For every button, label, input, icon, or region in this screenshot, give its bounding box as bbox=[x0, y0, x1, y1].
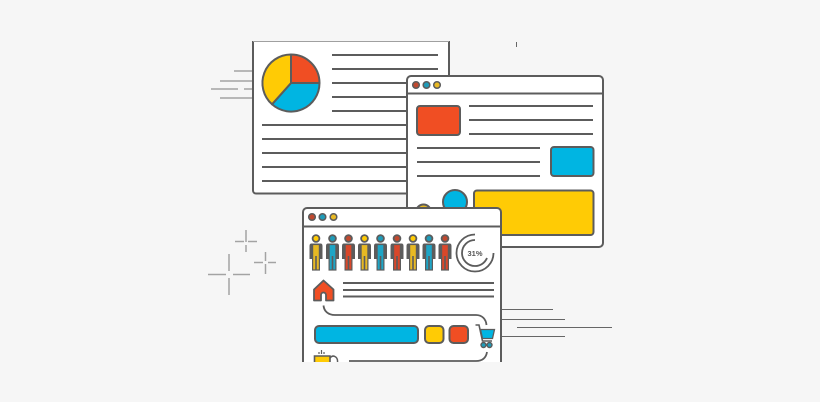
icon: shopping cart bbox=[476, 325, 494, 348]
people row bbox=[310, 235, 452, 270]
window text lines bbox=[417, 106, 593, 176]
panel: front browser window with people and shopping bbox=[302, 207, 502, 362]
window dots bbox=[413, 82, 440, 88]
panel: browser window with colour blocks bbox=[407, 76, 603, 247]
gauge 31%: 31% bbox=[467, 249, 483, 258]
yellow circle bbox=[416, 204, 431, 220]
blue bar bbox=[315, 326, 418, 343]
speed lines left bbox=[211, 71, 253, 98]
icon: house bbox=[314, 280, 334, 300]
connector line top bbox=[324, 306, 486, 325]
icon: coffee mug bbox=[314, 350, 338, 364]
small tick mark bbox=[516, 42, 518, 47]
speed lines right bbox=[501, 310, 612, 336]
connector line bottom bbox=[349, 352, 487, 361]
gauge 31% bbox=[456, 234, 494, 272]
pie chart bbox=[262, 54, 320, 112]
yellow block bbox=[474, 190, 594, 235]
sparkles bbox=[208, 230, 276, 295]
house text lines bbox=[343, 283, 494, 296]
yellow square bbox=[425, 326, 444, 343]
document text lines bbox=[262, 55, 438, 181]
red square bbox=[450, 326, 468, 343]
red block bbox=[417, 106, 460, 135]
window dots bbox=[309, 214, 337, 220]
blue block bbox=[551, 147, 594, 176]
panel: back document with pie chart bbox=[253, 30, 449, 194]
blue circle bbox=[443, 190, 467, 214]
